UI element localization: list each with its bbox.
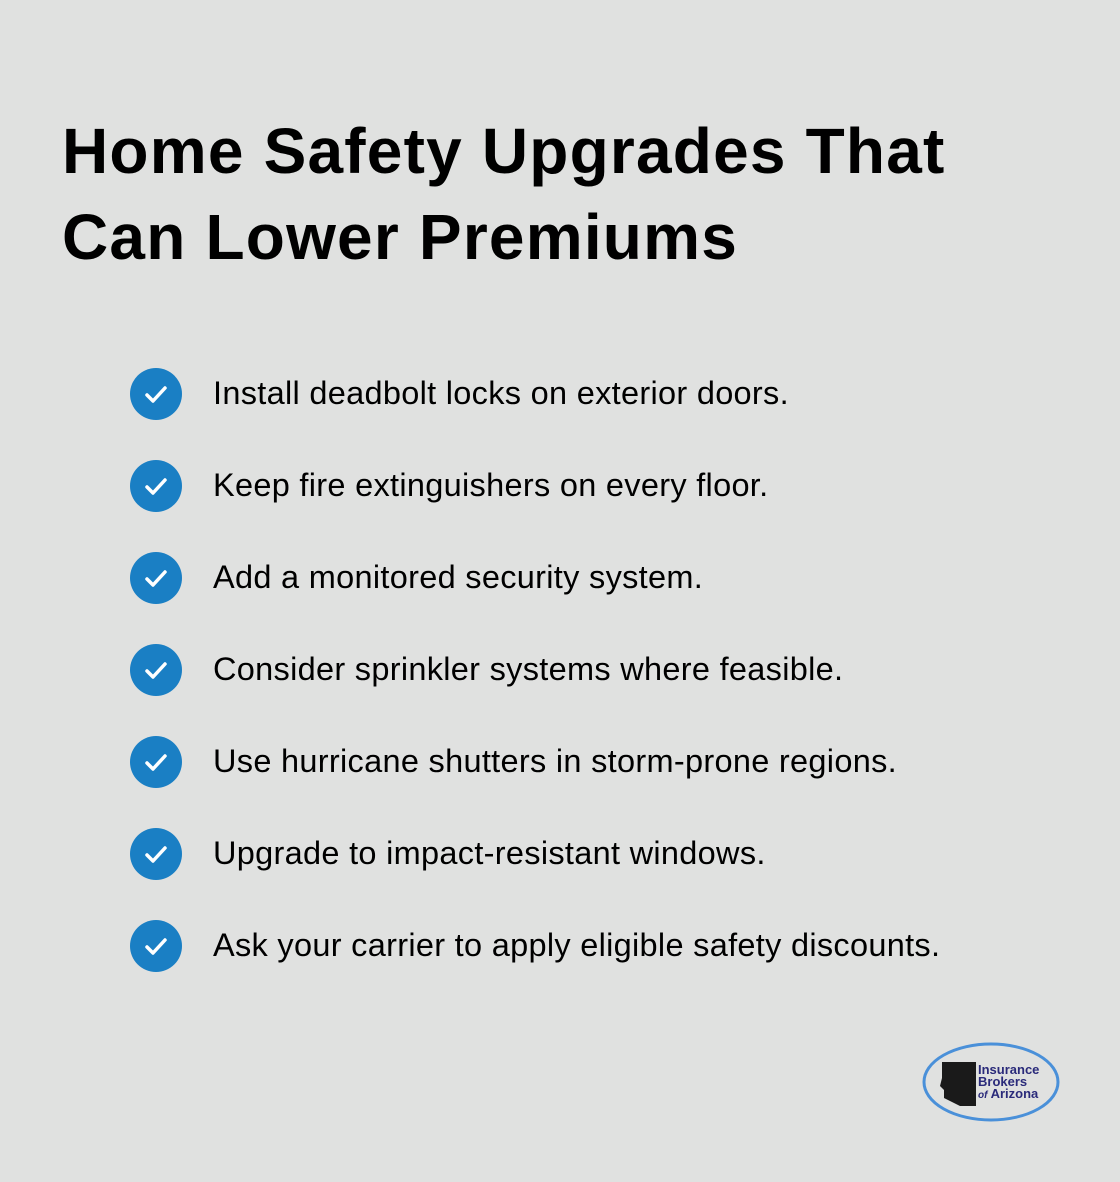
logo <box>922 1042 1060 1122</box>
item 5 <box>130 736 897 788</box>
item 6 <box>130 828 766 880</box>
item 4: Consider sprinkler systems where feasible. <box>213 651 843 687</box>
item 3 <box>130 552 703 604</box>
item 2 <box>130 460 768 512</box>
logo: Brokers <box>978 1074 1027 1089</box>
item 3: Add a monitored security system. <box>213 559 703 595</box>
title: Home Safety Upgrades That <box>62 115 946 187</box>
item 4 <box>130 644 843 696</box>
item 7 <box>130 920 940 972</box>
logo: Insurance <box>978 1062 1039 1077</box>
item 1 <box>130 368 789 420</box>
title <box>62 115 946 273</box>
item 2: Keep fire extinguishers on every floor. <box>213 467 768 503</box>
logo: of Arizona <box>978 1086 1039 1101</box>
item 7: Ask your carrier to apply eligible safety discounts. <box>213 927 940 963</box>
item 1: Install deadbolt locks on exterior doors. <box>213 375 789 411</box>
item 6: Upgrade to impact-resistant windows. <box>213 835 766 871</box>
item 5: Use hurricane shutters in storm-prone regions. <box>213 743 897 779</box>
title: Can Lower Premiums <box>62 201 738 273</box>
